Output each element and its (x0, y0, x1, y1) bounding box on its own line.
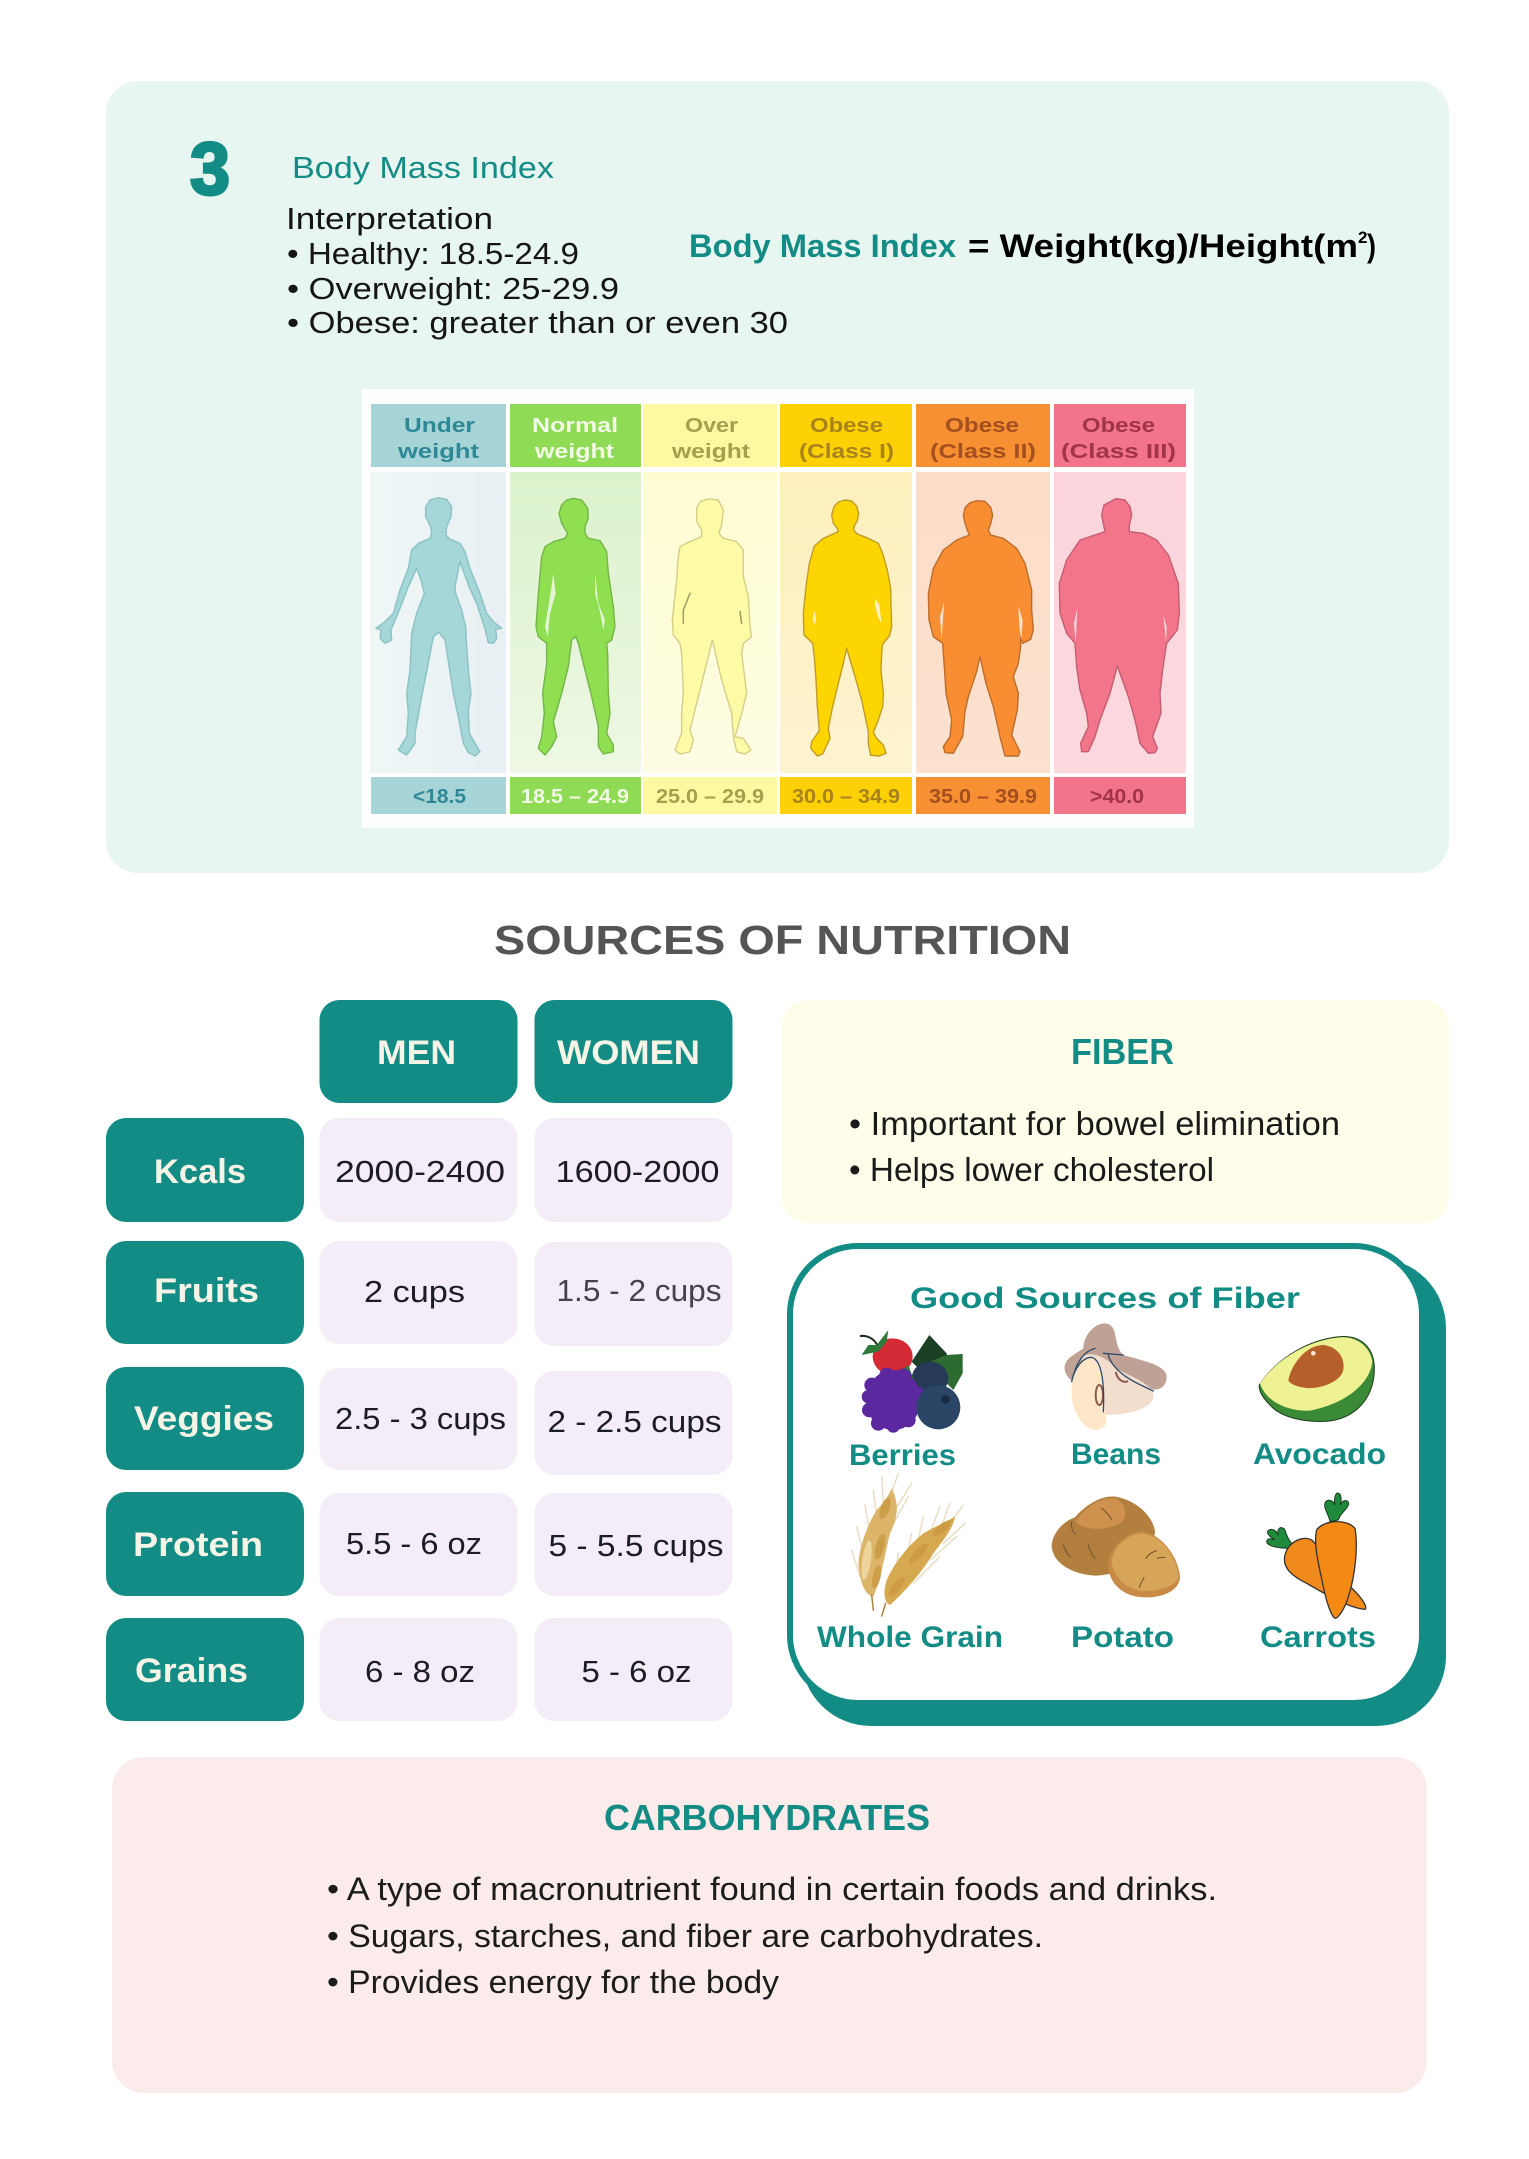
bmi header cells: weight (397, 441, 479, 463)
table column headers: WOMEN (557, 1034, 700, 1072)
label: carrots: Carrots (1260, 1621, 1376, 1654)
formula: Body Mass Index (689, 228, 956, 264)
body silhouettes: obese figures (803, 499, 1179, 756)
text block: interpretation: Interpretation (286, 201, 493, 236)
formula (689, 228, 1376, 264)
table column: men: 2 cups (364, 1274, 465, 1309)
formula: 2 (1358, 228, 1367, 247)
table column: women: 1.5 - 2 cups (556, 1273, 722, 1308)
bmi range cells: 18.5 – 24.9 (521, 786, 629, 808)
bmi range cells: <18.5 (413, 786, 466, 808)
table: intake by sex (106, 1000, 732, 1721)
bmi header cells: (Class III) (1061, 441, 1176, 463)
bmi header cells: Under (404, 415, 475, 437)
table column: women: 1600-2000 (556, 1154, 720, 1189)
label: potato: Potato (1071, 1621, 1174, 1654)
formula: ) (1367, 228, 1376, 264)
carbohydrates bullets: • A type of macronutrient found in certain foods and drinks. (327, 1871, 1217, 1907)
bmi header cells: Obese (945, 415, 1019, 437)
section number 3: 3 (190, 127, 230, 210)
bmi range cells: 30.0 – 34.9 (792, 786, 900, 808)
table column: men: 2000-2400 (335, 1154, 505, 1189)
text block: interpretation: • Healthy: 18.5-24.9 (287, 236, 579, 271)
table column: men: 5.5 - 6 oz (346, 1526, 482, 1561)
table row labels (106, 1118, 304, 1721)
fiber bullets: • Important for bowel elimination (849, 1105, 1340, 1142)
card heading: Good Sources of Fiber (910, 1282, 1300, 1315)
bmi header cells (371, 404, 1186, 467)
panel: fiber (782, 1000, 1449, 1223)
heading: sources of nutrition: SOURCES OF NUTRITION (494, 917, 1071, 963)
table column: men: 6 - 8 oz (365, 1654, 475, 1689)
table row labels: Grains (135, 1652, 248, 1690)
table row labels: Veggies (134, 1400, 274, 1438)
text block: interpretation: • Obese: greater than or even 30 (287, 305, 788, 340)
icon: potato (1052, 1496, 1180, 1597)
fiber bullets: • Helps lower cholesterol (849, 1151, 1214, 1188)
icon: berries (861, 1330, 963, 1433)
table column headers (320, 1000, 732, 1103)
table column: women: 5 - 6 oz (582, 1654, 692, 1689)
panel: carbohydrates (112, 1757, 1427, 2093)
table column: men: 2.5 - 3 cups (335, 1401, 506, 1436)
label: beans: Beans (1071, 1438, 1161, 1471)
bmi range cells: >40.0 (1090, 786, 1144, 808)
body silhouettes: lean figures (376, 498, 752, 756)
text block: interpretation (286, 201, 788, 340)
icon: carrots (1267, 1493, 1366, 1618)
label: whole grain: Whole Grain (817, 1621, 1003, 1654)
icon: beans (1065, 1323, 1167, 1430)
carbohydrates bullets: • Sugars, starches, and fiber are carbohydrates. (327, 1918, 1043, 1954)
panel: good sources of fiber (790, 1246, 1446, 1726)
bmi header cells: Obese (810, 415, 883, 437)
table column: women: 5 - 5.5 cups (548, 1528, 724, 1563)
panel: body mass index (106, 81, 1449, 873)
chart: bmi categories (362, 389, 1194, 828)
carbohydrates heading: CARBOHYDRATES (604, 1797, 930, 1838)
icon: whole grain (852, 1473, 965, 1616)
bmi range cells: 25.0 – 29.9 (656, 786, 764, 808)
bmi header cells: Normal (532, 415, 618, 437)
bmi range cells: 35.0 – 39.9 (929, 786, 1037, 808)
formula: = Weight(kg)/Height(m (968, 228, 1358, 264)
table column: women: 2 - 2.5 cups (548, 1404, 722, 1439)
fiber bullets (849, 1105, 1340, 1188)
bmi header cells: weight (534, 441, 614, 463)
table row labels: Kcals (154, 1153, 246, 1191)
bmi header cells: (Class II) (930, 441, 1036, 463)
carbohydrates bullets (327, 1871, 1217, 2000)
bmi range cells (371, 777, 1186, 814)
table row labels: Fruits (154, 1272, 259, 1310)
heading: body mass index: Body Mass Index (292, 150, 555, 185)
label: avocado: Avocado (1253, 1438, 1386, 1471)
bmi header cells: (Class I) (799, 441, 894, 463)
bmi header cells: weight (671, 441, 750, 463)
bmi header cells: Over (685, 415, 738, 437)
icon: avocado (1259, 1337, 1374, 1421)
label: berries: Berries (849, 1439, 956, 1472)
fiber heading: FIBER (1071, 1031, 1174, 1072)
carbohydrates bullets: • Provides energy for the body (327, 1964, 779, 2000)
text block: interpretation: • Overweight: 25-29.9 (287, 271, 619, 306)
table column: men (320, 1118, 518, 1721)
table row labels: Protein (133, 1526, 263, 1564)
table column: women (534, 1118, 732, 1721)
bmi header cells: Obese (1082, 415, 1155, 437)
table column headers: MEN (377, 1034, 456, 1072)
